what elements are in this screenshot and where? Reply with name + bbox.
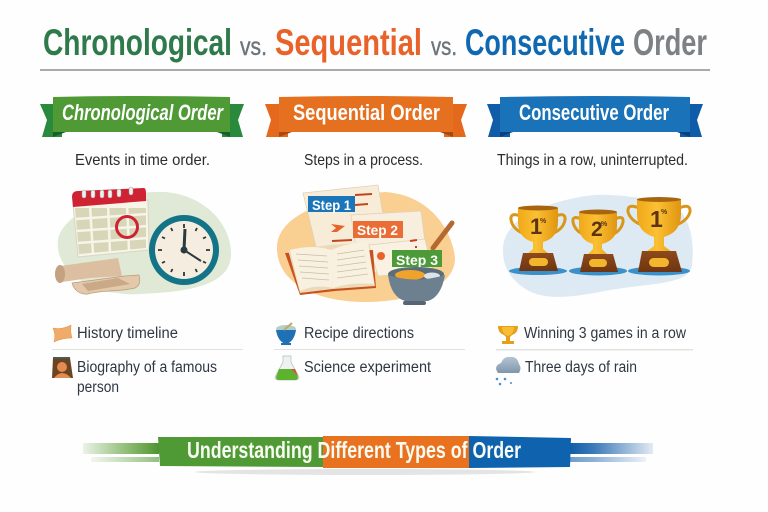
- icon: portrait: [52, 357, 73, 378]
- ribbon: consecutive order: Consecutive Order: [519, 100, 669, 125]
- ribbon: sequential order: [265, 96, 467, 137]
- illustration: three trophies: [503, 195, 693, 297]
- ribbon: chronological order: [40, 96, 244, 137]
- footer banner: [83, 436, 653, 475]
- icon: small trophy: [498, 326, 518, 344]
- description: Steps in a process.: [304, 152, 423, 169]
- icon: mortar: [276, 323, 296, 345]
- icon: clock: [149, 215, 219, 285]
- label: step 1: Step 1: [312, 198, 351, 213]
- list item: science experiment: [275, 356, 432, 380]
- icon: trophy 1: [511, 206, 565, 271]
- list item: winning games: Winning 3 games in a row: [524, 325, 687, 342]
- paper: [303, 185, 388, 255]
- icon: trophy 1: 1: [530, 214, 542, 239]
- icon: calendar: [72, 187, 149, 257]
- icon: bowl: [388, 267, 445, 305]
- panel: sequential order: [265, 96, 467, 380]
- title: Consecutive: [465, 22, 625, 63]
- icon: trophy 1: %: [540, 218, 547, 225]
- icon: trophy 2: %: [601, 221, 608, 228]
- illustration: calendar, clock and scrolls: [55, 187, 231, 294]
- icon: trophy 3: [628, 197, 690, 272]
- icon: parchment: [53, 325, 72, 342]
- icon: spoon: [433, 223, 452, 248]
- icon: rain cloud: [496, 357, 520, 385]
- icon: flask: [275, 356, 299, 380]
- icon: trophy 2: 2: [591, 218, 603, 241]
- icon: trophy 3: 1: [650, 206, 663, 232]
- illustration: recipe steps, book and bowl: [277, 185, 455, 305]
- icon: scrolls: [55, 258, 140, 294]
- list item: recipe directions: Recipe directions: [304, 325, 414, 342]
- icon: trophy 3: %: [661, 209, 668, 216]
- label: step 3: [392, 250, 442, 268]
- ribbon: chronological order: Chronological Order: [62, 100, 224, 125]
- icon: trophy 2: [573, 210, 623, 272]
- list item: biography: person: [77, 379, 119, 396]
- panel: chronological order: [40, 96, 244, 396]
- list item: three days of rain: Three days of rain: [525, 359, 637, 376]
- label: step 2: Step 2: [357, 223, 398, 238]
- title: vs.: [240, 33, 267, 61]
- title: Order: [633, 22, 707, 63]
- list item: history timeline: History timeline: [77, 325, 178, 342]
- list item: biography: [52, 357, 217, 396]
- title: vs.: [431, 33, 457, 61]
- list item: biography: Biography of a famous: [77, 359, 217, 376]
- ribbon: sequential order: Sequential Order: [293, 100, 440, 125]
- icon: open book: [285, 242, 376, 295]
- ribbon: consecutive order: [487, 96, 703, 137]
- title: Chronological: [43, 22, 232, 63]
- list item: recipe directions: [276, 323, 414, 345]
- list item: science experiment: Science experiment: [304, 359, 432, 376]
- footer banner: Understanding Different Types of Order: [187, 437, 521, 463]
- description: Events in time order.: [75, 152, 210, 169]
- description: Things in a row, uninterrupted.: [497, 152, 688, 169]
- panel: consecutive order: [487, 96, 703, 385]
- list item: three days of rain: [496, 357, 637, 385]
- label: step 3: Step 3: [396, 253, 439, 268]
- title: [43, 22, 707, 63]
- title: Sequential: [275, 22, 422, 63]
